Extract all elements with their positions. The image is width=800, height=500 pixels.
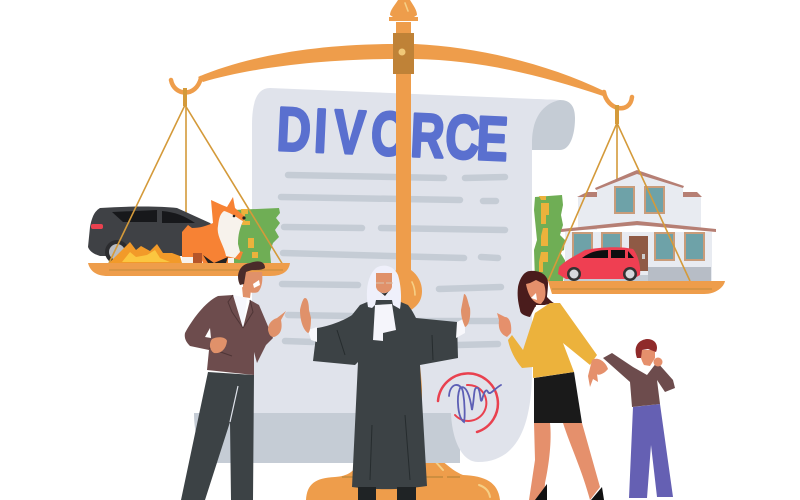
scale pillar with finial bbox=[389, 0, 422, 440]
document: divorce decree paper bbox=[194, 88, 575, 463]
icon: red car bbox=[558, 247, 640, 281]
paper text lines bbox=[281, 175, 505, 345]
icon: dark car bbox=[88, 206, 215, 264]
balance beam with hooks bbox=[171, 33, 632, 108]
icon: flames bbox=[109, 242, 182, 263]
left pan with strings bbox=[88, 105, 290, 276]
stamp and signature bbox=[438, 373, 501, 432]
figure: judge bbox=[300, 266, 470, 500]
icon: corgi dog bbox=[182, 197, 246, 263]
right pan center string bbox=[615, 105, 619, 180]
base of the scales bbox=[306, 442, 500, 500]
icon: house bbox=[561, 170, 716, 281]
figure: crying child bbox=[603, 339, 675, 498]
figure: angry woman bbox=[497, 271, 608, 500]
icon: stack of money left bbox=[228, 208, 280, 263]
figure: angry man bbox=[181, 261, 286, 500]
title: DIVORCE: DIVORCE bbox=[275, 94, 510, 174]
icon: stack of money right bbox=[534, 195, 566, 281]
left pan strings (behind goods) bbox=[185, 88, 186, 215]
right pan with strings bbox=[548, 123, 725, 294]
